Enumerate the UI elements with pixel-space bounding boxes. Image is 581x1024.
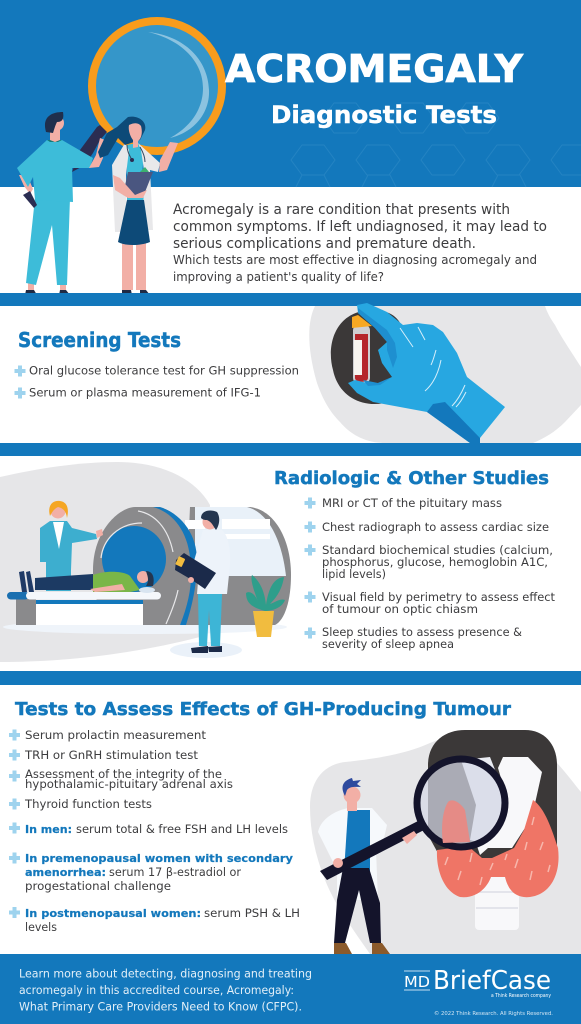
footer call to action text: What Primary Care Providers Need to Know (CFPC). [19,1000,302,1014]
bullet list: MRI or CT of the pituitary mass [322,496,502,510]
illustration: MRI scan scene [0,462,291,662]
intro paragraph: serious complications and premature death. [173,236,476,252]
divider band [0,443,581,456]
bullet list: serum 17 β-estradiol or [109,865,241,879]
bullet list: Oral glucose tolerance test for GH suppression [29,364,299,378]
panel: screening tests [14,303,581,443]
divider band [0,671,581,685]
illustration: doctor examining thyroid with magnifier [310,730,581,954]
bullet list: Standard biochemical studies (calcium, [322,543,553,557]
bullet list: of tumour on optic chiasm [322,602,478,616]
header banner [0,0,581,187]
panel: radiologic and other studies [0,462,555,662]
icon: large magnifying lens [92,21,222,151]
bullet list: In premenopausal women with secondary [25,852,293,865]
bullet list: lipid levels) [322,567,386,581]
bullet list: serum total & free FSH and LH levels [76,822,288,836]
bullet list: severity of sleep apnea [322,637,454,651]
bullet list: progestational challenge [25,879,171,893]
bullet list: Serum prolactin measurement [25,728,206,742]
logo: MD BriefCase: MD [404,973,430,991]
illustration: male doctor in scrubs [17,112,107,295]
intro paragraph [173,202,547,284]
panel: tests for effects of GH-producing tumour [9,699,581,954]
logo: MD BriefCase: BriefCase [433,966,551,996]
copyright: © 2022 Think Research. All Rights Reserved. [434,1010,553,1017]
bullet list: Chest radiograph to assess cardiac size [322,520,549,534]
heading: Tests to Assess Effects of GH-Producing Tumour [15,699,511,720]
footer call to action text: acromegaly in this accredited course, Acromegaly: [19,983,294,997]
bullet list: amenorrhea: [25,866,106,879]
intro paragraph: improving a patient's quality of life? [173,270,384,284]
heading: Radiologic & Other Studies [274,468,549,489]
bullet list: serum PSH & LH [204,906,300,920]
bullet list [9,728,300,934]
bullet list: Assessment of the integrity of the [25,767,222,781]
bullet list [14,364,299,400]
bullet list [304,496,555,651]
bullet list: hypothalamic-pituitary adrenal axis [25,777,233,791]
subtitle: Diagnostic Tests [271,101,497,129]
bullet list: In men: [25,823,72,836]
title: ACROMEGALY [225,47,523,91]
bullet list: Serum or plasma measurement of IFG-1 [29,386,261,400]
bullet list: Thyroid function tests [24,797,152,811]
divider band [0,293,581,306]
logo: MD BriefCase: a Think Research company [491,993,551,999]
intro paragraph: Acromegaly is a rare condition that presents with [173,202,510,218]
footer call to action text [19,966,312,1014]
bullet list: Visual field by perimetry to assess effect [322,590,555,604]
bullet list: phosphorus, glucose, hemoglobin A1C, [322,555,548,569]
bullet list: TRH or GnRH stimulation test [24,748,198,762]
heading: Screening Tests [18,328,181,352]
bullet list: In postmenopausal women: [25,907,201,920]
intro paragraph: Which tests are most effective in diagnosing acromegaly and [173,253,537,267]
illustration: female doctor with clipboard [98,117,178,295]
bullet list: levels [25,920,57,934]
footer call to action text: Learn more about detecting, diagnosing and treating [19,966,312,980]
footer panel [0,954,581,1024]
illustration: gloved hand holding blood tube [309,303,581,443]
bullet list: Sleep studies to assess presence & [322,625,522,639]
intro paragraph: common symptoms. If left undiagnosed, it may lead to [173,219,547,235]
